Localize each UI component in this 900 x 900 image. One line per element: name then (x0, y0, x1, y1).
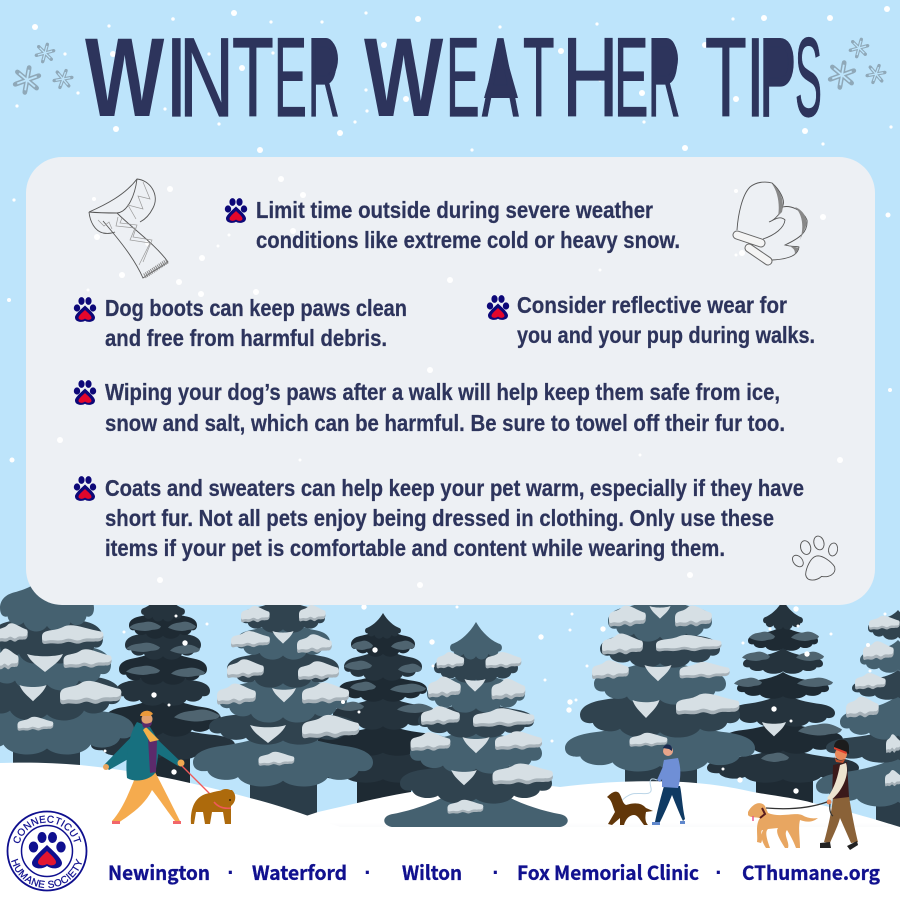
footer locations: Newington (108, 857, 210, 886)
tip: dog boots (105, 295, 407, 351)
leash: red (182, 766, 211, 795)
tree: light centre-right (565, 590, 755, 787)
footer locations: CThumane.org (742, 857, 880, 886)
dog: dark brown (607, 792, 653, 825)
snowfall over trees (104, 604, 886, 794)
title: E (614, 15, 648, 140)
icon: paw outline (786, 531, 846, 585)
title: W (364, 15, 443, 140)
title: N (179, 15, 234, 140)
title: E (446, 15, 480, 140)
person: walker in blue hoodie (652, 745, 685, 825)
dog: tan labrador (748, 803, 818, 848)
tip: limit time outside (256, 197, 680, 253)
tip: coats and sweaters (105, 475, 804, 561)
bullet: tip 4 (74, 380, 96, 405)
tree: front centre (384, 622, 568, 841)
footer locations: · (227, 860, 235, 885)
tip: wiping paws: Wiping your dog’s paws after a walk will help keep them safe from ice, (105, 379, 780, 405)
footer locations: Fox Memorial Clinic (517, 857, 699, 886)
bullet: tip 5 (74, 476, 96, 501)
leash: black (766, 802, 833, 816)
logo: Connecticut Humane Society (6, 810, 88, 892)
bullet: tip 3 (487, 295, 509, 320)
icon: scarf (89, 179, 168, 278)
dog: brown mastiff (191, 789, 235, 824)
footer locations: · (364, 860, 372, 885)
snowfall behind title (7, 6, 893, 462)
footer band (0, 827, 900, 900)
tip: reflective wear (517, 292, 815, 348)
title: R (308, 15, 340, 140)
leash: pale blue (618, 779, 657, 804)
tree: light left (0, 572, 134, 775)
title: I (165, 15, 188, 140)
icons: snowflakes right (826, 35, 889, 92)
footer locations: Waterford (252, 857, 347, 886)
footer locations: · (715, 860, 723, 885)
snow hill: left (0, 763, 340, 840)
title: P (759, 15, 796, 140)
footer locations: Wilton (402, 857, 462, 886)
tip: coats and sweaters: short fur. Not all pets enjoy being dressed in clothing. Only use these (105, 505, 774, 531)
footer locations: · (492, 860, 500, 885)
title: H (562, 15, 619, 140)
footer locations (108, 857, 880, 886)
tree: dark back right (707, 600, 859, 810)
title: T (705, 15, 747, 140)
bullet: tip 1 (225, 198, 247, 223)
title: E (274, 15, 307, 140)
snowfall over panel (57, 176, 843, 588)
tree: dark back centre (307, 613, 459, 805)
tip: limit time outside: Limit time outside during severe weather (256, 197, 653, 223)
title (85, 15, 822, 140)
title: A (482, 15, 519, 140)
tip: coats and sweaters: items if your pet is comfortable and content while wearing them. (105, 535, 725, 561)
icons: snowflakes left (11, 40, 76, 97)
tip: dog boots: Dog boots can keep paws clean (105, 295, 407, 321)
person: walker in beanie (820, 740, 858, 850)
bullet: tip 2 (74, 297, 96, 322)
tree: dark back left (91, 590, 235, 790)
icon: mittens (737, 182, 807, 261)
tip: wiping paws: snow and salt, which can be harmful. Be sure to towel off their fur too. (105, 410, 785, 436)
title: T (232, 15, 274, 140)
tip: reflective wear: Consider reflective wear for (517, 292, 787, 318)
panel: tips (26, 157, 875, 605)
tip: dog boots: and free from harmful debris. (105, 325, 387, 351)
logo: Connecticut Humane Society: HUMANE SOCIETY (11, 858, 82, 888)
title: R (648, 15, 680, 140)
tip: coats and sweaters: Coats and sweaters can help keep your pet warm, especially if they have (105, 475, 804, 501)
tip: wiping paws (105, 379, 785, 436)
snow hill: right (300, 781, 900, 840)
title: T (523, 15, 554, 140)
tree: light centre-left (193, 595, 373, 825)
tip: reflective wear: you and your pup during walks. (517, 322, 815, 348)
title: W (85, 15, 164, 140)
tree: light far right (816, 610, 900, 827)
logo: Connecticut Humane Society: CONNECTICUT (14, 816, 82, 844)
tip: limit time outside: conditions like extreme cold or heavy snow. (256, 227, 680, 253)
person: walker in teal coat (103, 711, 184, 824)
title: I (746, 15, 765, 140)
title: S (795, 15, 822, 140)
